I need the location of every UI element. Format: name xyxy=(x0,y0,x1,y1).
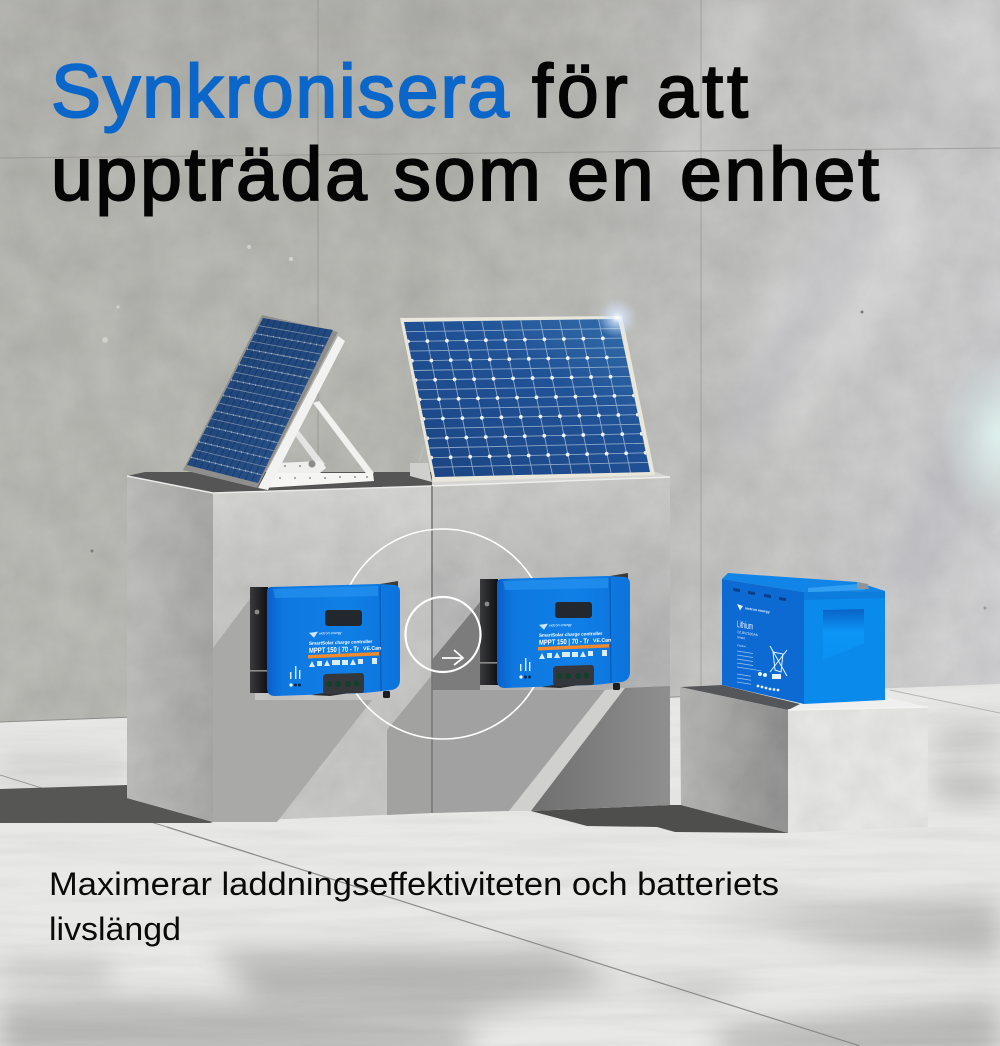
certification marks xyxy=(757,672,781,691)
display cover xyxy=(555,602,592,618)
controller body xyxy=(497,576,630,688)
left concrete block xyxy=(127,472,432,822)
mounting plate xyxy=(480,573,628,685)
mounting plate xyxy=(250,581,398,693)
certification icons xyxy=(309,658,377,667)
controller labels: VE.Can xyxy=(593,638,611,644)
title: för att xyxy=(532,49,748,133)
battery vents xyxy=(733,588,786,601)
charge controller right xyxy=(480,573,630,690)
controller labels: victron energy xyxy=(549,623,572,628)
controller labels: VE.Can xyxy=(363,646,381,652)
controller labels: SmartSolar charge controller xyxy=(539,631,603,638)
shadow on right block xyxy=(432,602,480,690)
small concrete block xyxy=(680,685,928,833)
battery label: Lithium xyxy=(737,619,753,633)
floor shadows cast by the blocks xyxy=(0,785,789,833)
controller labels: SmartSolar charge controller xyxy=(309,639,373,646)
background: concrete wall xyxy=(0,0,1000,725)
battery label: Caution xyxy=(737,643,746,648)
status bars and LEDs xyxy=(289,666,301,687)
large solar panel xyxy=(400,298,655,482)
right concrete block xyxy=(432,470,670,813)
panel stand xyxy=(258,336,374,490)
battery label: Smart xyxy=(737,635,745,640)
controller labels: MPPT 150 | 70 - Tr xyxy=(309,644,359,655)
charge controller left xyxy=(250,581,400,698)
controller labels: MPPT 150 | 70 - Tr xyxy=(539,636,589,647)
certification icons xyxy=(539,650,607,659)
shadow on left block xyxy=(213,592,372,822)
orange stripe xyxy=(538,644,609,650)
orange stripe xyxy=(308,652,379,658)
battery label: 12,8V/100Ah xyxy=(737,630,758,637)
subtitle: Maximerar laddningseffektiviteten och batteriets xyxy=(49,866,779,902)
title: Synkronisera xyxy=(51,49,509,133)
battery label: victron energy xyxy=(745,606,770,614)
rear bracket xyxy=(410,446,432,482)
title: uppträda som en enhet xyxy=(51,132,879,216)
icon: arrow xyxy=(442,650,463,665)
lithium battery xyxy=(722,573,885,704)
subtitle: livslängd xyxy=(49,911,181,947)
small sync circle with arrow xyxy=(406,597,480,672)
controller labels xyxy=(539,622,611,647)
large sync circle xyxy=(338,529,548,739)
title xyxy=(51,49,879,216)
battery label xyxy=(737,604,770,687)
terminal block xyxy=(311,673,390,698)
handle recess xyxy=(823,609,864,660)
background: concrete floor xyxy=(0,684,1000,1046)
controller labels xyxy=(309,630,381,655)
terminal block xyxy=(541,665,620,690)
recycling mark xyxy=(770,646,787,676)
status bars and LEDs xyxy=(519,658,531,679)
small solar panel on stand xyxy=(183,315,374,490)
lens flare xyxy=(597,298,637,338)
display cover xyxy=(325,610,362,626)
subtitle xyxy=(49,866,779,947)
controller body xyxy=(267,584,400,696)
controller labels: victron energy xyxy=(319,631,342,636)
